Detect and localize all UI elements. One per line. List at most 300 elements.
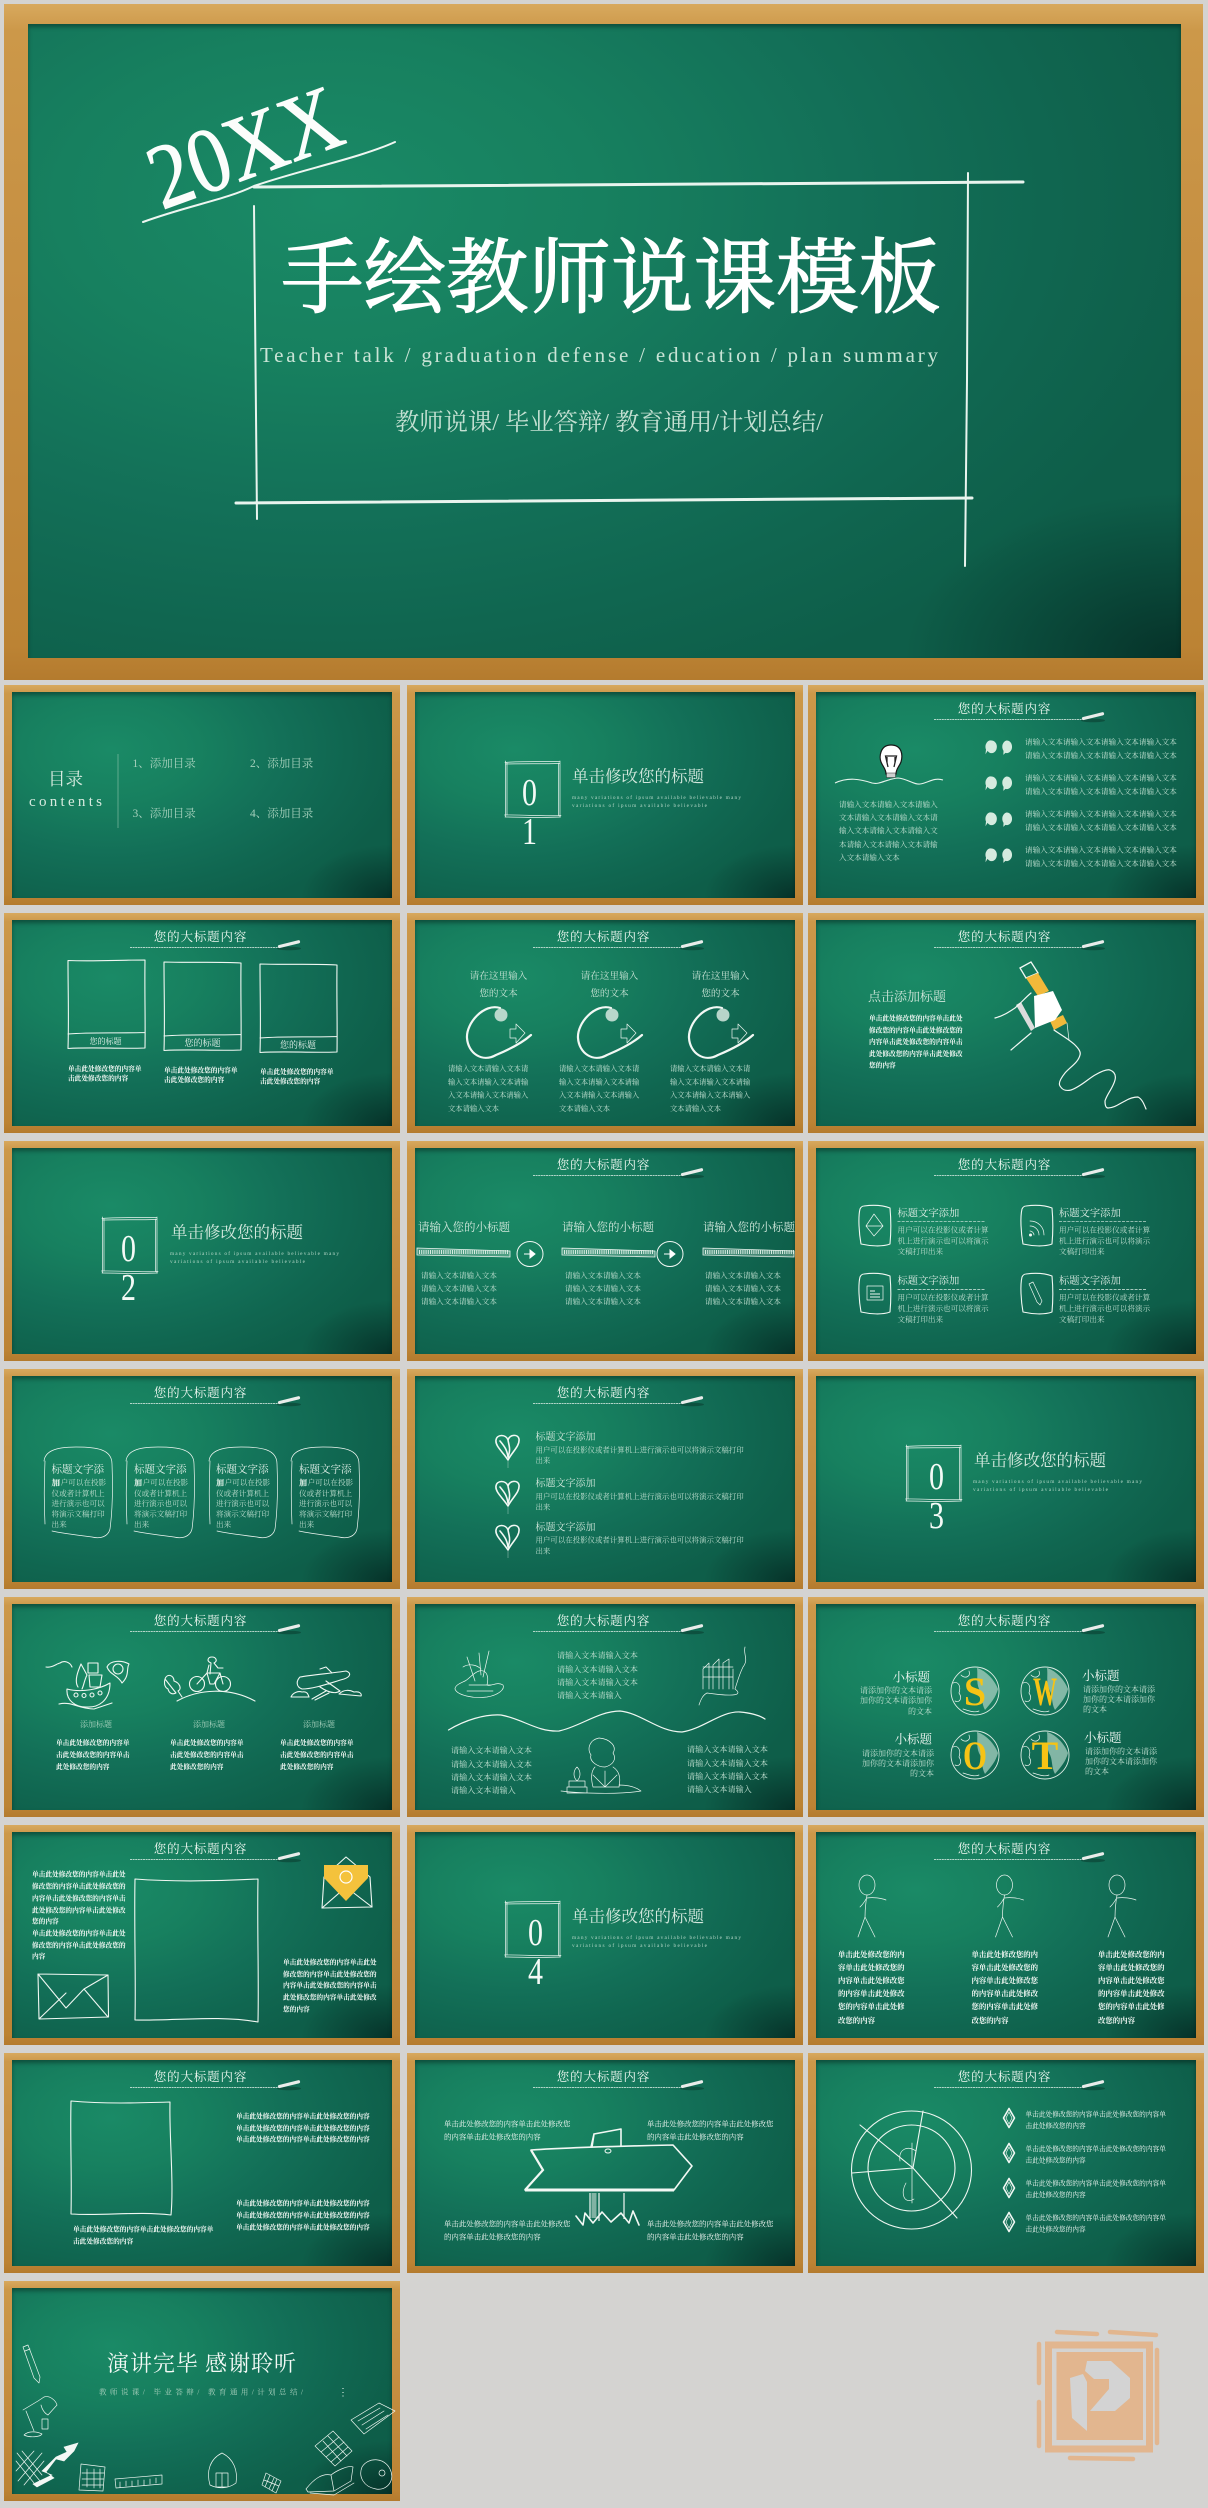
column texts: 请输入文本请输入文本请: [448, 1064, 528, 1073]
number box 02: 2: [121, 1267, 136, 1309]
doodle: castle on cloud: [699, 1647, 746, 1705]
header: [934, 1613, 1105, 1634]
header: [533, 929, 704, 950]
list texts: 击此处修改您的内容: [1026, 2121, 1086, 2130]
section description: [572, 1934, 741, 1949]
panel: ribbon process slide: [407, 1141, 803, 1361]
top text: 请输入文本请输入文本: [557, 1650, 638, 1660]
caption: 单击此处修改您的内容单击此处修改您的内容单: [73, 2224, 214, 2234]
header: [934, 1841, 1105, 1862]
list titles: [536, 1430, 596, 1534]
card texts: 将演示文稿打印: [52, 1508, 105, 1518]
text top left: 的内容单击此处修改您的内容: [444, 2132, 541, 2142]
header: [130, 1841, 301, 1862]
list titles: 标题文字添加: [536, 1476, 596, 1490]
list texts: 击此处修改您的内容: [1026, 2190, 1086, 2199]
card texts: 仪或者计算机上: [216, 1488, 270, 1498]
column texts: 击此处修改您的内容单击: [280, 1750, 354, 1759]
panel: three arc arrows slide: [407, 913, 803, 1133]
doodle: arrow: [33, 2443, 78, 2487]
SWOT left texts: 加你的文本请添加你: [860, 1695, 933, 1705]
icon: T globe: [1021, 1731, 1069, 1779]
card texts: 出来: [216, 1519, 232, 1529]
column texts: 请输入文本请输入文本: [565, 1270, 641, 1280]
doodle: hatching: [16, 2451, 44, 2485]
card texts: 用户可以在投影: [135, 1477, 189, 1487]
number box 04: [504, 1901, 561, 1993]
panel: doodles three column slide: [4, 1597, 400, 1817]
column texts: 改您的内容: [1098, 2016, 1136, 2025]
doodle: calculator: [351, 2403, 395, 2434]
column texts: 请输入文本请输入文本: [421, 1283, 497, 1293]
card titles: 标题文字添: [299, 1462, 352, 1476]
card texts: 将演示文稿打印: [299, 1508, 353, 1518]
card texts: 进行演示也可以: [134, 1498, 188, 1508]
card texts: 出来: [134, 1519, 150, 1529]
captions: 单击此处修改您的内容单: [164, 1066, 238, 1074]
list titles: 标题文字添加: [536, 1430, 596, 1443]
text top right: 单击此处修改您的内容单击此处修改您: [647, 2118, 774, 2128]
number box 01: 1: [522, 811, 537, 853]
left text block: 入文本请输入文本: [839, 852, 900, 862]
column texts: 请输入文本请输入文本请: [559, 1064, 639, 1073]
doodle: cyclist: [164, 1657, 255, 1701]
icon: card tile: [859, 1273, 891, 1314]
card outlines: [44, 1447, 359, 1538]
frame: [71, 2101, 172, 2215]
right text: 修改您的内容单击此处修改您的: [283, 1970, 377, 1978]
panel: hero title slide: [4, 4, 1203, 680]
panel: three frames slide: [4, 913, 400, 1133]
column texts: 改您的内容: [838, 2016, 876, 2025]
column texts: 此处修改您的内容: [170, 1762, 224, 1771]
panel: wave doodles slide: [407, 1597, 803, 1817]
header: 您的大标题内容: [958, 1841, 1051, 1856]
item texts: 用户可以在投影仪或者计算: [898, 1224, 989, 1234]
header: 您的大标题内容: [557, 1613, 650, 1628]
card texts: 出来: [299, 1519, 315, 1529]
SWOT left titles: 小标题: [892, 1670, 930, 1684]
number box 03: [906, 1445, 962, 1537]
column headings: 请在这里输入: [692, 970, 750, 982]
hand drawn rectangle frame: [236, 173, 1023, 566]
header: [130, 1613, 301, 1634]
right text block: 请输入文本请输入文本请输入文本请输入文本: [1025, 750, 1177, 760]
card titles: 标题文字添: [134, 1462, 187, 1476]
column texts: 输入文本请输入文本请输: [559, 1078, 640, 1086]
frame 3: [260, 964, 337, 1052]
panel: target diagram slide: [808, 2053, 1204, 2273]
column texts: 击此处修改您的内容单击: [170, 1750, 244, 1759]
SWOT right texts: 加你的文本请添加你: [1083, 1694, 1156, 1704]
item texts: 文稿打印出来: [898, 1246, 943, 1256]
icon: rss tile: [1021, 1205, 1053, 1246]
icon: S globe: [951, 1667, 999, 1715]
paragraph: 您的内容: [869, 1060, 896, 1070]
header: 您的大标题内容: [154, 2069, 247, 2084]
card titles: 加: [52, 1478, 60, 1488]
column headings: 请在这里输入: [470, 970, 528, 982]
bottom left text: 请输入文本请输入文本: [451, 1772, 532, 1782]
column texts: 改您的内容: [972, 2016, 1009, 2025]
card texts: 用户可以在投影: [53, 1477, 107, 1487]
card texts: 仪或者计算机上: [299, 1488, 353, 1498]
dots: [342, 2388, 344, 2396]
column texts: 单击此处修改您的内容单: [280, 1738, 354, 1747]
header: 您的大标题内容: [557, 2069, 650, 2084]
header: 您的大标题内容: [958, 1157, 1051, 1172]
header: [934, 929, 1105, 950]
column texts: 请输入文本请输入文本: [705, 1296, 781, 1306]
header: [934, 2069, 1105, 2090]
contents heading: 目录: [48, 769, 83, 789]
SWOT left texts: 的文本: [910, 1768, 934, 1778]
contents heading: contents: [29, 794, 102, 810]
doodle: ruler: [115, 2475, 162, 2488]
icon: arc arrows: [467, 1007, 753, 1058]
column texts: 击此处修改您的内容单击: [56, 1750, 130, 1759]
list texts: 用户可以在投影仪或者计算机上进行演示也可以将演示文稿打印: [536, 1534, 744, 1544]
left text: 内容: [32, 1952, 46, 1960]
SWOT left titles: 小标题: [894, 1732, 932, 1746]
item texts: 用户可以在投影仪或者计算: [898, 1292, 989, 1302]
card texts: 将演示文稿打印: [216, 1508, 270, 1518]
bottom right text: 请输入文本请输入文本: [687, 1771, 768, 1781]
icon: stick figures: [858, 1875, 1136, 1937]
doodle: disc: [361, 2460, 392, 2489]
item texts: 用户可以在投影仪或者计算: [1059, 1292, 1151, 1302]
card texts: 用户可以在投影: [217, 1477, 271, 1487]
number box 03: 0: [929, 1456, 944, 1498]
panel: bulb and quotes slide: [808, 685, 1204, 905]
contents items: 2、添加目录: [250, 756, 314, 770]
item titles: [898, 1206, 1121, 1287]
column texts: 入文本请输入文本请输入: [448, 1090, 529, 1100]
header: 您的大标题内容: [557, 1157, 650, 1172]
bottom left text: 请输入文本请输入: [451, 1785, 516, 1795]
column labels: [80, 1719, 335, 1729]
header: [934, 701, 1105, 722]
left text: 修改您的内容单击此处修改您的: [32, 1940, 126, 1950]
doodle: pencil: [23, 2345, 40, 2383]
panel: hand with marker slide: [808, 913, 1204, 1133]
section description: many variations of ipsum available believable many: [170, 1250, 339, 1257]
section title: 单击修改您的标题: [171, 1223, 304, 1242]
icon: S globe: S: [964, 1669, 986, 1714]
column texts: 您的内容单击此处修: [972, 2002, 1039, 2011]
subheading: 点击添加标题: [868, 989, 946, 1004]
list texts: 单击此处修改您的内容单击此处修改您的内容单: [1026, 2110, 1166, 2118]
header: [533, 1157, 704, 1178]
SWOT right texts: 请添加你的文本请添: [1085, 1746, 1158, 1756]
frame 3: 您的标题: [280, 1039, 316, 1050]
left text: 内容单击此处修改您的内容单击: [32, 1894, 126, 1902]
panel: signpost slide: [407, 2053, 803, 2273]
right text block: 请输入文本请输入文本请输入文本请输入文本: [1025, 736, 1177, 746]
card titles: 加: [299, 1478, 307, 1488]
wave line: [835, 778, 943, 784]
icon: envelope tile: [859, 1205, 891, 1246]
closing subtitle: 教师说课/ 毕业答辩/ 教育通用/计划总结/: [99, 2386, 304, 2396]
quote icons: [985, 740, 1012, 863]
column texts: 此处修改您的内容: [56, 1762, 110, 1771]
SWOT right texts: 加你的文本请添加你: [1085, 1756, 1158, 1766]
panel: four icon list slide: [808, 1141, 1204, 1361]
top text: 请输入文本请输入文本: [557, 1677, 638, 1687]
item titles: 标题文字添加: [898, 1274, 959, 1287]
doodle: rotated grid card: [315, 2431, 352, 2466]
card titles: [52, 1462, 352, 1488]
left text: 您的内容: [32, 1916, 59, 1926]
header: [533, 1613, 704, 1634]
item titles: 标题文字添加: [1059, 1274, 1121, 1287]
number box 04: 0: [528, 1912, 543, 1954]
header: [130, 2069, 301, 2090]
text bottom left: 的内容单击此处修改您的内容: [444, 2232, 541, 2242]
header: 您的大标题内容: [154, 929, 247, 944]
column texts: 的内容单击此处修改: [972, 1989, 1039, 1998]
header: [533, 2069, 704, 2090]
contents items: [132, 756, 314, 820]
list texts: 单击此处修改您的内容单击此处修改您的内容单: [1026, 2213, 1166, 2222]
column labels: 添加标题: [303, 1719, 335, 1729]
header: 您的大标题内容: [154, 1841, 247, 1856]
header: [533, 1385, 704, 1406]
number box 02: [102, 1217, 158, 1309]
list texts: 单击此处修改您的内容单击此处修改您的内容单: [1026, 2144, 1166, 2153]
card texts: 进行演示也可以: [299, 1498, 353, 1508]
frame 2: [164, 962, 241, 1050]
icon: T globe: T: [1032, 1733, 1059, 1778]
header: 您的大标题内容: [958, 1613, 1051, 1628]
captions: 击此处修改您的内容: [260, 1076, 320, 1086]
icon: hearts: [496, 1435, 519, 1558]
text bottom left: 单击此处修改您的内容单击此处修改您: [444, 2218, 571, 2228]
column headings: 您的文本: [701, 988, 740, 1000]
subheadings: 请输入您的小标题: [418, 1220, 510, 1234]
panel: closing slide: [4, 2281, 400, 2501]
captions: 击此处修改您的内容: [164, 1075, 224, 1084]
text bottom right: 的内容单击此处修改您的内容: [647, 2232, 744, 2242]
icon: W globe: [1021, 1667, 1069, 1715]
ribbons: [417, 1248, 794, 1257]
doodle: open book: [306, 2467, 354, 2495]
column texts: 请输入文本请输入文本: [421, 1296, 497, 1306]
panel: section 04: [407, 1825, 803, 2045]
section title: 单击修改您的标题: [974, 1451, 1106, 1470]
contents items: 1、添加目录: [132, 756, 196, 770]
section title: 单击修改您的标题: [572, 767, 704, 786]
item texts: 机上进行演示也可以将演示: [1059, 1236, 1151, 1246]
doodle: backpack: [208, 2453, 236, 2488]
list texts: 出来: [536, 1546, 551, 1556]
captions: 击此处修改您的内容: [68, 1074, 128, 1082]
right text block: 请输入文本请输入文本请输入文本请输入文本: [1025, 844, 1177, 854]
left text block: 输入文本请输入文本请输入文: [839, 825, 938, 835]
left text: 此处修改您的内容单击此处修改: [32, 1906, 126, 1914]
icon: diamonds: [1004, 2108, 1014, 2232]
panel: four cards slide: [4, 1369, 400, 1589]
section description: variations of ipsum available believable: [572, 802, 708, 809]
right text: 内容单击此处修改您的内容单击: [283, 1980, 377, 1990]
icon: pencil tile: [1021, 1273, 1053, 1314]
chinese subtitle: 教师说课/ 毕业答辩/ 教育通用/计划总结/: [395, 409, 823, 436]
column headings: [470, 970, 750, 1000]
text top left: 单击此处修改您的内容单击此处修改您: [444, 2118, 571, 2128]
SWOT right texts: 的文本: [1085, 1766, 1109, 1776]
item texts: 文稿打印出来: [1059, 1314, 1105, 1324]
frame 1: 您的标题: [90, 1036, 122, 1046]
card texts: 仪或者计算机上: [134, 1488, 188, 1498]
contents heading: [29, 769, 102, 810]
card titles: 标题文字添: [52, 1462, 104, 1476]
column headings: 您的文本: [590, 988, 629, 1000]
number box 01: 0: [522, 772, 537, 814]
SWOT right texts: 请添加你的文本请添: [1083, 1684, 1156, 1694]
number box 01: [504, 761, 561, 853]
captions: 单击此处修改您的内容单: [260, 1067, 334, 1076]
bottom right text: 请输入文本请输入文本: [687, 1744, 768, 1754]
divider: [117, 754, 119, 828]
column texts: 单击此处修改您的内: [972, 1950, 1039, 1959]
right text: 您的内容: [283, 2004, 310, 2014]
caption: 击此处修改您的内容: [73, 2236, 133, 2246]
list texts: 出来: [536, 1455, 551, 1465]
panel: slide contents: [4, 685, 400, 905]
panel: photo frame and envelopes slide: [4, 1825, 400, 2045]
left text: 单击此处修改您的内容单击此处: [32, 1870, 126, 1878]
column texts: 容单击此处修改您的: [972, 1963, 1039, 1972]
SWOT right texts: 的文本: [1083, 1704, 1107, 1714]
list texts: 击此处修改您的内容: [1026, 2156, 1086, 2164]
header: 您的大标题内容: [958, 929, 1051, 944]
bottom left text: 请输入文本请输入文本: [451, 1745, 532, 1755]
column texts: 入文本请输入文本请输入: [670, 1090, 751, 1100]
text bottom right: 单击此处修改您的内容单击此处修改您: [647, 2218, 774, 2228]
SWOT right texts: [1083, 1684, 1158, 1776]
column texts: 内容单击此处修改您: [1098, 1976, 1165, 1985]
doodle: instruments and books: [455, 1651, 503, 1698]
card titles: 标题文字添: [216, 1462, 269, 1476]
paragraph: 此处修改您的内容单击此处修改: [869, 1049, 963, 1058]
section description: many variations of ipsum available believable many: [572, 794, 741, 801]
paragraph: 单击此处修改您的内容单击此处: [869, 1014, 963, 1022]
header: 您的大标题内容: [154, 1613, 247, 1628]
panel: hearts list slide: [407, 1369, 803, 1589]
column texts: 请输入文本请输入文本: [565, 1283, 641, 1293]
watermark logo: [1036, 2330, 1160, 2462]
column texts: 此处修改您的内容: [280, 1762, 334, 1771]
column texts: 入文本请输入文本请输入: [559, 1090, 640, 1100]
english subtitle: Teacher talk / graduation defense / education / plan summary: [260, 343, 938, 367]
right texts: 单击此处修改您的内容单击此处修改您的内容: [236, 2112, 370, 2120]
header: 您的大标题内容: [958, 701, 1051, 716]
item texts: 机上进行演示也可以将演示: [898, 1303, 989, 1313]
item texts: 机上进行演示也可以将演示: [898, 1236, 989, 1246]
right text: 单击此处修改您的内容单击此处: [283, 1958, 377, 1966]
captions: 单击此处修改您的内容单: [68, 1064, 142, 1073]
list texts: 单击此处修改您的内容单击此处修改您的内容单: [1026, 2178, 1166, 2188]
icon: O globe: [951, 1731, 999, 1779]
icon: light bulb: [880, 745, 902, 778]
SWOT right titles: 小标题: [1084, 1730, 1122, 1745]
column texts: 容单击此处修改您的: [838, 1963, 905, 1972]
column texts: 内容单击此处修改您: [838, 1976, 905, 1985]
panel: tall frame slide: [4, 2053, 400, 2273]
right text block: 请输入文本请输入文本请输入文本请输入文本: [1025, 858, 1177, 868]
section title: 单击修改您的标题: [572, 1907, 704, 1926]
item texts: 机上进行演示也可以将演示: [1059, 1303, 1151, 1313]
subheadings: 请输入您的小标题: [562, 1220, 654, 1234]
section description: variations of ipsum available believable: [973, 1486, 1109, 1493]
list titles: 标题文字添加: [536, 1520, 596, 1534]
column texts: 请输入文本请输入文本: [705, 1270, 781, 1280]
subheadings: [418, 1221, 795, 1232]
card texts: 用户可以在投影: [300, 1477, 354, 1487]
header: 您的大标题内容: [958, 2069, 1051, 2084]
left text: 修改您的内容单击此处修改您的: [32, 1882, 126, 1890]
frame 2: 您的标题: [184, 1037, 221, 1048]
column texts: 的内容单击此处修改: [838, 1989, 905, 1998]
list texts: 用户可以在投影仪或者计算机上进行演示也可以将演示文稿打印: [536, 1444, 744, 1454]
panel: SWOT slide: [808, 1597, 1204, 1817]
card texts: 仪或者计算机上: [52, 1488, 105, 1498]
column texts: 容单击此处修改您的: [1098, 1963, 1165, 1972]
icon: W globe: W: [1033, 1669, 1057, 1714]
column texts: 输入文本请输入文本请输: [448, 1078, 529, 1086]
icon: yellow mail: [322, 1857, 372, 1908]
header: [130, 1385, 301, 1406]
top text: 请输入文本请输入文本: [557, 1664, 638, 1674]
paragraph: 修改您的内容单击此处修改您的: [869, 1026, 963, 1034]
section description: [572, 794, 741, 809]
underline under year: [143, 142, 395, 222]
column texts: 请输入文本请输入文本请: [670, 1064, 750, 1073]
card titles: 加: [134, 1478, 142, 1488]
item texts: 用户可以在投影仪或者计算: [1059, 1224, 1151, 1234]
year 20XX: 20XX: [134, 65, 355, 229]
top text: 请输入文本请输入: [557, 1690, 622, 1700]
SWOT left titles: [892, 1670, 932, 1746]
card texts: 出来: [52, 1519, 67, 1529]
header: 您的大标题内容: [154, 1385, 247, 1400]
right text block: 请输入文本请输入文本请输入文本请输入文本: [1025, 808, 1177, 818]
frame 1: [68, 960, 145, 1048]
SWOT right titles: 小标题: [1082, 1668, 1120, 1683]
column texts: 文本请输入文本: [670, 1104, 721, 1113]
card texts: 进行演示也可以: [52, 1498, 105, 1508]
column texts: 文本请输入文本: [559, 1104, 610, 1113]
left text block: 文本请输入文本请输入文本请: [839, 812, 938, 822]
SWOT left texts: 请添加你的文本请添: [862, 1748, 935, 1758]
closing title: 演讲完毕 感谢聆听: [107, 2351, 296, 2376]
doodle: reading child: [561, 1738, 641, 1793]
SWOT right titles: [1082, 1668, 1122, 1745]
item texts: 文稿打印出来: [1059, 1246, 1105, 1256]
bottom left text: 请输入文本请输入文本: [451, 1759, 532, 1769]
column texts: 单击此处修改您的内容单: [56, 1738, 130, 1747]
wave line: [448, 1711, 765, 1732]
bottom right text: 请输入文本请输入: [687, 1784, 752, 1794]
list texts: 出来: [536, 1502, 551, 1512]
column texts: 输入文本请输入文本请输: [670, 1078, 751, 1086]
card texts: 将演示文稿打印: [134, 1508, 188, 1518]
list texts: 用户可以在投影仪或者计算机上进行演示也可以将演示文稿打印: [536, 1491, 744, 1501]
column labels: 添加标题: [193, 1719, 225, 1729]
panel: section 01: [407, 685, 803, 905]
panel: stick figures slide: [808, 1825, 1204, 2045]
icon: arrow circles: [517, 1242, 683, 1266]
